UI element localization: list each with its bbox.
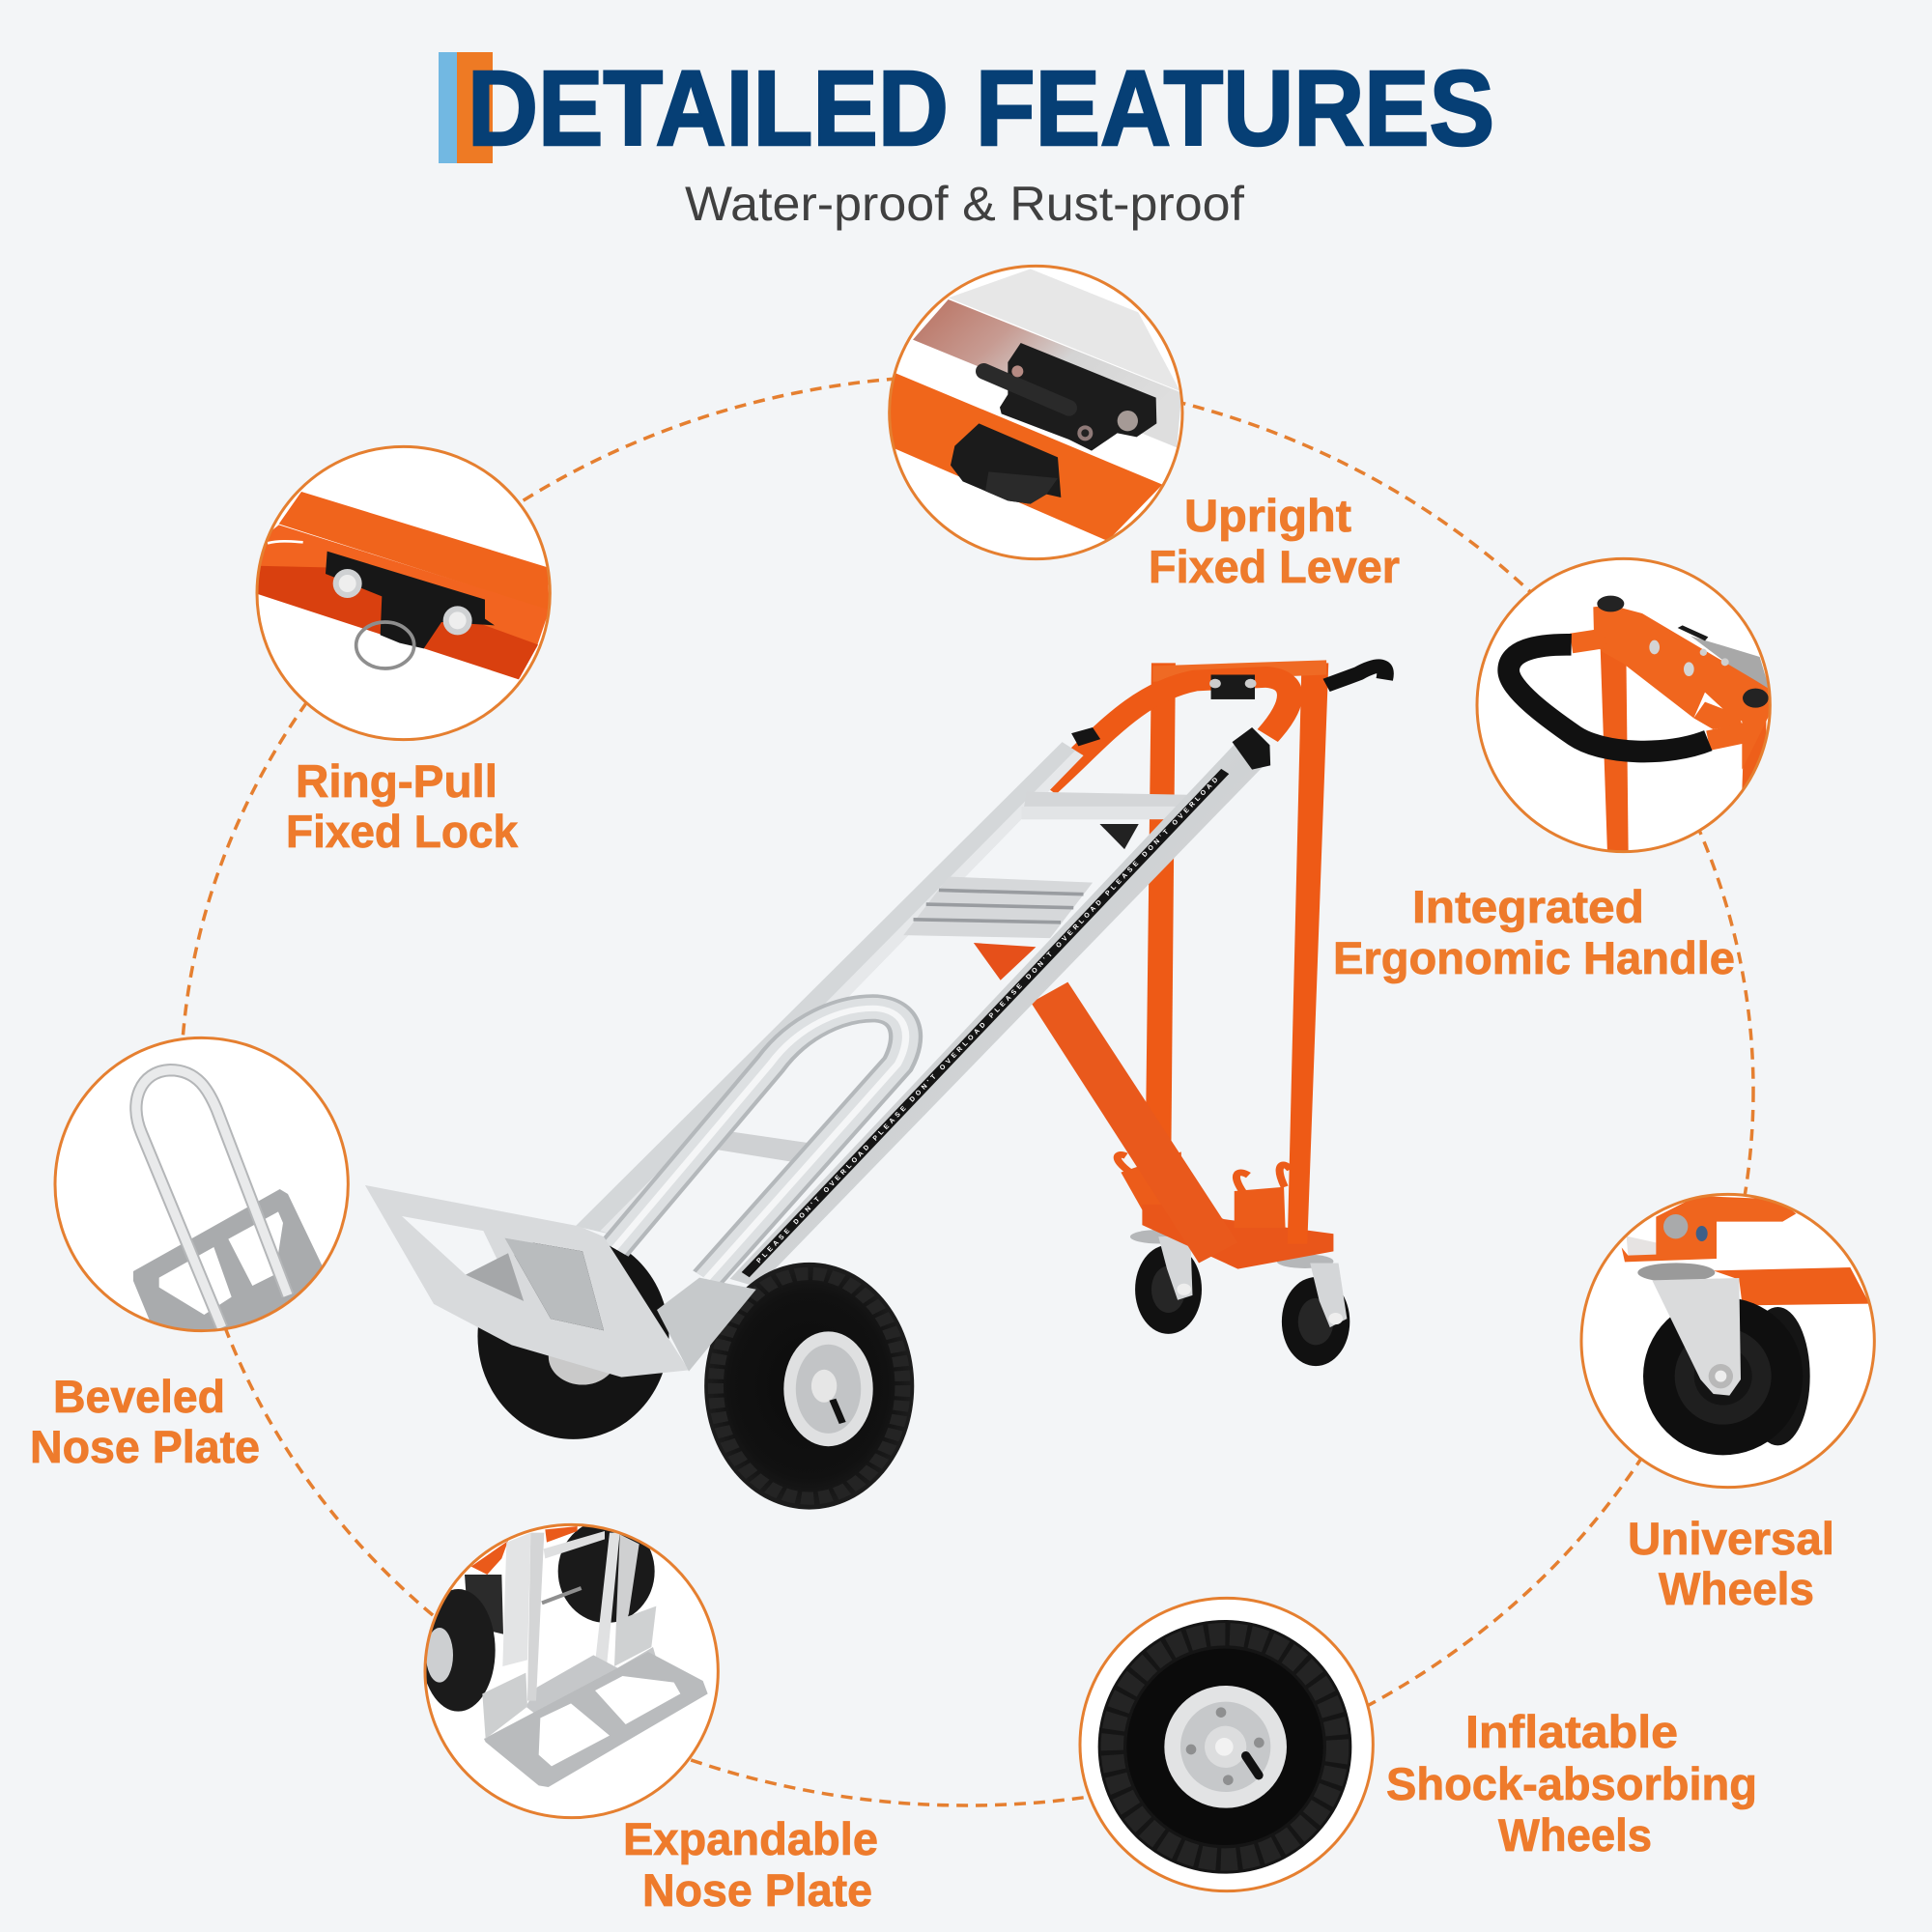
label: integrated ergonomic handle: Integrated	[1412, 881, 1644, 932]
aluminium rails	[576, 727, 1270, 1287]
label: expandable nose plate: Expandable	[623, 1813, 878, 1864]
label: upright fixed lever	[1149, 490, 1400, 592]
label: universal wheels: Universal	[1628, 1513, 1834, 1564]
central hand truck illustration	[365, 660, 1385, 1510]
nose plate photo	[133, 1070, 324, 1336]
label: beveled nose plate: Beveled	[53, 1371, 225, 1422]
label: ring-pull fixed lock: Fixed Lock	[286, 806, 519, 857]
expandable plate photo	[421, 1520, 708, 1787]
label: expandable nose plate: Nose Plate	[642, 1864, 872, 1916]
circle outline	[55, 1037, 348, 1331]
caster wheels	[1130, 1230, 1350, 1366]
label: beveled nose plate: Nose Plate	[30, 1421, 260, 1472]
orange rear frame	[974, 660, 1385, 1269]
overload warning strip text: PLEASE DON'T OVERLOAD PLEASE DON'T OVERLOAD PLEASE DON'T OVERLOAD PLEASE DON'T OVERLOAD	[755, 777, 1219, 1264]
tyre photo	[1098, 1620, 1351, 1874]
label: inflatable shock-absorbing wheels: Inflatable	[1465, 1706, 1678, 1757]
U-shaped handle	[614, 1009, 906, 1279]
panel: beveled nose plate	[55, 1037, 348, 1336]
panel: inflatable shock-absorbing wheels	[1080, 1598, 1373, 1891]
circle outline	[890, 266, 1182, 559]
circle outline	[1581, 1194, 1874, 1488]
circle outline	[257, 446, 550, 740]
dashed connector ring	[181, 376, 1753, 1805]
panel: integrated ergonomic handle	[1477, 558, 1770, 853]
label: beveled nose plate	[30, 1371, 260, 1472]
front wheel	[704, 1263, 914, 1510]
lever photo	[889, 269, 1181, 541]
label: integrated ergonomic handle: Ergonomic Handle	[1333, 932, 1735, 983]
panel: upright fixed lever	[889, 266, 1182, 559]
caster photo	[1622, 1196, 1869, 1455]
panel: ring-pull fixed lock	[255, 446, 550, 740]
circle outline	[1080, 1598, 1373, 1891]
label: universal wheels	[1628, 1513, 1834, 1614]
label: ring-pull fixed lock	[286, 755, 519, 857]
title: DETAILED FEATURES	[468, 49, 1494, 168]
handle photo	[1509, 596, 1770, 853]
lock photo	[255, 492, 550, 679]
nose plate	[365, 1185, 756, 1378]
circle outline	[425, 1524, 718, 1818]
label: inflatable shock-absorbing wheels: Shock-absorbing	[1386, 1758, 1757, 1809]
label: integrated ergonomic handle	[1333, 881, 1735, 983]
panel: expandable nose plate	[421, 1520, 718, 1818]
label: upright fixed lever: Upright	[1184, 490, 1351, 541]
label: universal wheels: Wheels	[1659, 1563, 1814, 1614]
circle outline	[1477, 558, 1770, 852]
label: inflatable shock-absorbing wheels: Wheels	[1498, 1809, 1652, 1861]
label: upright fixed lever: Fixed Lever	[1149, 541, 1400, 592]
subtitle: Water-proof & Rust-proof	[685, 177, 1244, 231]
label: ring-pull fixed lock: Ring-Pull	[296, 755, 497, 807]
label: expandable nose plate	[623, 1813, 878, 1916]
rear wheel	[477, 1234, 668, 1439]
label: inflatable shock-absorbing wheels	[1386, 1706, 1757, 1861]
panel: universal wheels	[1581, 1194, 1874, 1488]
